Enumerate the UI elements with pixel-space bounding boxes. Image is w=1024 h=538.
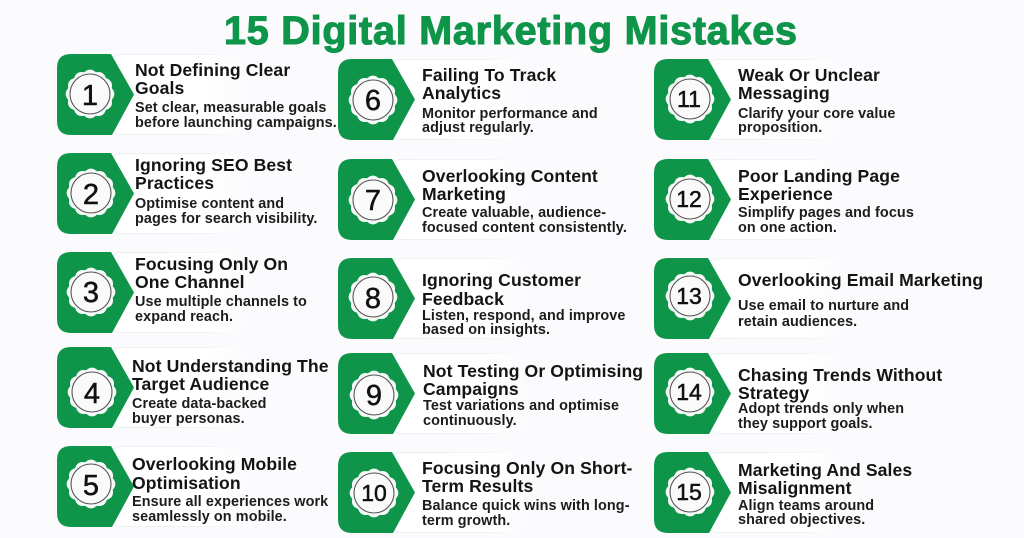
icon: number badge 15: [666, 468, 714, 516]
heading: mistake 11: Weak Or Unclear: [738, 65, 880, 85]
description: mistake 12: Simplify pages and focus: [738, 205, 914, 221]
heading: mistake 14: Chasing Trends Without: [738, 365, 942, 385]
description: mistake 13: retain audiences.: [738, 314, 857, 330]
description: mistake 2: Optimise content and: [135, 196, 284, 212]
icon: number badge 6: [349, 76, 397, 124]
description: mistake 11: Clarify your core value: [738, 106, 895, 122]
heading: mistake 7: Overlooking Content: [422, 166, 598, 186]
description: mistake 15: shared objectives.: [738, 512, 865, 528]
heading: mistake 6: Analytics: [422, 83, 501, 103]
heading: mistake 14: Strategy: [738, 383, 809, 403]
description: mistake 7: focused content consistently.: [422, 220, 627, 236]
description: mistake 7: Create valuable, audience-: [422, 205, 606, 221]
heading: mistake 12: Poor Landing Page: [738, 166, 900, 186]
heading: mistake 15: Marketing And Sales: [738, 460, 912, 480]
description: mistake 3: expand reach.: [135, 309, 233, 325]
icon: number badge 5: 5: [83, 470, 99, 502]
heading: mistake 10: Focusing Only On Short-: [422, 458, 633, 478]
icon: number badge 1: [66, 70, 114, 118]
heading: mistake 9: Campaigns: [423, 379, 519, 399]
description: mistake 2: pages for search visibility.: [135, 211, 318, 227]
icon: number badge 3: [67, 268, 115, 316]
heading: mistake 2: Ignoring SEO Best: [135, 155, 292, 175]
icon: number badge 15: 15: [676, 479, 702, 505]
description: mistake 8: based on insights.: [422, 322, 550, 338]
panel: mistake 8: [338, 258, 626, 339]
description: mistake 13: Use email to nurture and: [738, 298, 909, 314]
icon: number badge 14: 14: [676, 379, 702, 405]
heading: mistake 2: Practices: [135, 173, 214, 193]
panel: mistake 11: [654, 59, 895, 140]
panel: mistake 7: [338, 159, 627, 240]
heading: mistake 12: Experience: [738, 184, 833, 204]
icon: number badge 11: 11: [677, 86, 701, 112]
panel: mistake 14: [654, 353, 942, 434]
icon: number badge 14: [666, 368, 714, 416]
icon: number badge 7: [349, 176, 397, 224]
description: mistake 5: seamlessly on mobile.: [132, 509, 287, 525]
icon: number badge 7: 7: [365, 185, 381, 217]
heading: mistake 5: Overlooking Mobile: [132, 454, 297, 474]
description: mistake 5: Ensure all experiences work: [132, 494, 329, 510]
description: mistake 4: buyer personas.: [132, 411, 245, 427]
description: mistake 11: proposition.: [738, 120, 822, 136]
description: mistake 8: Listen, respond, and improve: [422, 308, 626, 324]
panel: mistake 10: [338, 452, 633, 533]
icon: number badge 3: 3: [83, 277, 99, 309]
icon: number badge 5: [67, 460, 115, 508]
panel: mistake 5: [57, 446, 329, 527]
panel: mistake 13: [654, 258, 983, 339]
icon: number badge 2: [67, 169, 115, 217]
description: mistake 9: continuously.: [423, 413, 517, 429]
icon: number badge 4: [68, 368, 116, 416]
heading: mistake 6: Failing To Track: [422, 65, 556, 85]
panel: mistake 2: [57, 153, 318, 234]
description: mistake 12: on one action.: [738, 220, 837, 236]
icon: number badge 12: 12: [676, 186, 702, 212]
icon: number badge 12: [666, 175, 714, 223]
description: mistake 15: Align teams around: [738, 498, 874, 514]
icon: number badge 1: 1: [82, 80, 98, 112]
heading: mistake 1: Goals: [135, 78, 185, 98]
heading: mistake 4: Target Audience: [132, 374, 270, 394]
icon: number badge 9: [350, 371, 398, 419]
heading: mistake 4: Not Understanding The: [132, 356, 329, 376]
title: 15 Digital Marketing Mistakes: [224, 9, 797, 53]
icon: number badge 8: [349, 273, 397, 321]
icon: number badge 10: 10: [361, 480, 387, 506]
heading: mistake 3: Focusing Only On: [135, 254, 288, 274]
description: mistake 3: Use multiple channels to: [135, 294, 307, 310]
description: mistake 9: Test variations and optimise: [423, 398, 619, 414]
panel: mistake 9: [338, 353, 643, 434]
description: mistake 1: before launching campaigns.: [135, 115, 337, 131]
description: mistake 14: they support goals.: [738, 416, 873, 432]
heading: mistake 3: One Channel: [135, 272, 245, 292]
heading: mistake 5: Optimisation: [132, 473, 241, 493]
description: mistake 10: term growth.: [422, 513, 510, 529]
heading: mistake 11: Messaging: [738, 83, 830, 103]
panel: mistake 6: [338, 59, 598, 140]
icon: number badge 8: 8: [365, 283, 381, 315]
icon: number badge 13: 13: [676, 283, 702, 309]
heading: mistake 9: Not Testing Or Optimising: [423, 361, 643, 381]
icon: number badge 6: 6: [365, 85, 381, 117]
heading: mistake 8: Feedback: [422, 289, 504, 309]
icon: number badge 10: [350, 469, 398, 517]
icon: number badge 13: [666, 272, 714, 320]
panel: mistake 1: [57, 54, 337, 135]
icon: number badge 11: [666, 75, 714, 123]
heading: mistake 1: Not Defining Clear: [135, 60, 290, 80]
description: mistake 10: Balance quick wins with long-: [422, 498, 630, 514]
description: mistake 6: adjust regularly.: [422, 120, 534, 136]
panel: mistake 3: [57, 252, 307, 333]
heading: mistake 13: Overlooking Email Marketing: [738, 270, 983, 290]
icon: number badge 9: 9: [366, 380, 382, 412]
description: mistake 14: Adopt trends only when: [738, 401, 904, 417]
description: mistake 1: Set clear, measurable goals: [135, 100, 326, 116]
heading: mistake 8: Ignoring Customer: [422, 270, 581, 290]
description: mistake 4: Create data-backed: [132, 396, 267, 412]
heading: mistake 7: Marketing: [422, 184, 506, 204]
heading: mistake 15: Misalignment: [738, 478, 852, 498]
panel: mistake 15: [654, 452, 912, 533]
icon: number badge 4: 4: [84, 378, 100, 410]
description: mistake 6: Monitor performance and: [422, 106, 598, 122]
icon: number badge 2: 2: [83, 179, 99, 211]
heading: mistake 10: Term Results: [422, 476, 533, 496]
panel: mistake 4: [57, 347, 329, 428]
panel: mistake 12: [654, 159, 914, 240]
